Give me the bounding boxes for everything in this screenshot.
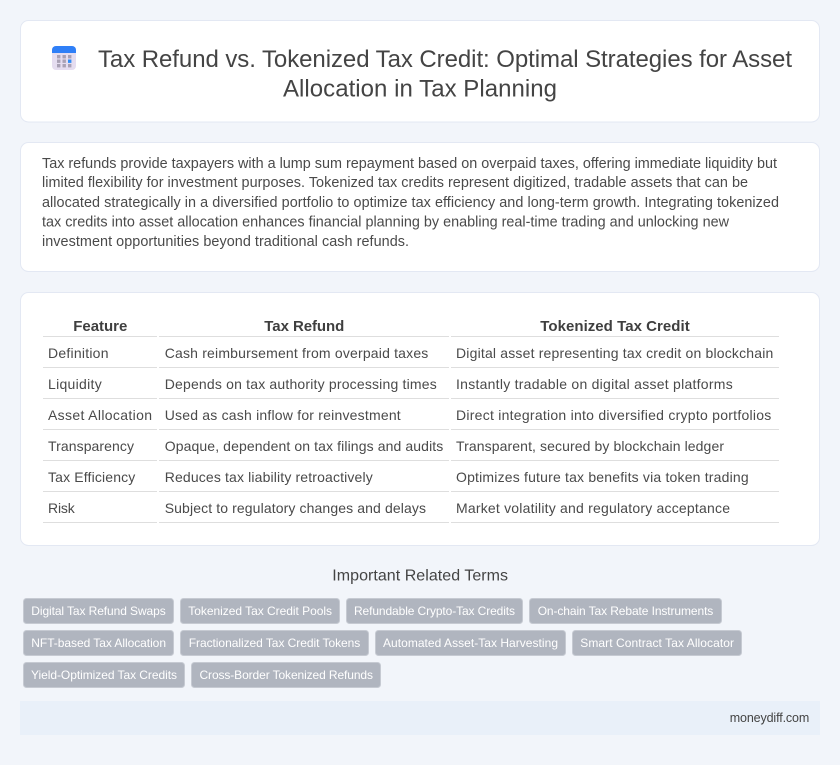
text block: intro: Tax refunds provide taxpayers with a lump sum repayment based on overpaid taxes, offering immediate liquidity but: [42, 156, 777, 172]
row: asset allocation: Direct integration into diversified crypto portfolios: [456, 407, 771, 423]
row: risk: [48, 500, 730, 516]
table header row: Tokenized Tax Credit: [540, 318, 690, 335]
row: tax efficiency: Tax Efficiency: [48, 469, 135, 485]
panel: intro paragraph: [20, 142, 820, 272]
tag list: related terms: [24, 598, 742, 688]
text block: intro: tax credits into asset allocation enhances financial planning by enabling real-time trading and unlocking new: [42, 214, 730, 230]
panel: comparison table: [20, 292, 820, 546]
tag: [192, 662, 380, 688]
row: risk: Risk: [48, 500, 76, 516]
title: Tax Refund vs. Tokenized Tax Credit: Optimal Strategies for Asset: [98, 46, 792, 73]
row: risk: Market volatility and regulatory acceptance: [456, 500, 730, 516]
row: asset allocation: Asset Allocation: [48, 407, 152, 423]
tag: [572, 630, 742, 656]
footer bar: [20, 701, 820, 735]
row: definition: Cash reimbursement from overpaid taxes: [165, 345, 428, 361]
row: tax efficiency: Reduces tax liability retroactively: [165, 469, 373, 485]
row: tax efficiency: Optimizes future tax benefits via token trading: [456, 469, 749, 485]
tag: Smart Contract Tax Allocator: [580, 636, 734, 650]
text block: intro: limited flexibility for investment purposes. Tokenized tax credits represent digitized, tradable assets that can be: [42, 175, 748, 191]
title: Allocation in Tax Planning: [283, 76, 557, 102]
footer source text: moneydiff.com: [730, 711, 809, 725]
tag: [180, 598, 340, 624]
text block: intro: investment opportunities beyond traditional cash refunds.: [42, 234, 409, 250]
row: definition: Definition: [48, 345, 108, 361]
table header row: Tax Refund: [264, 318, 344, 335]
row: liquidity: Instantly tradable on digital asset platforms: [456, 376, 733, 392]
tag: Automated Asset-Tax Harvesting: [383, 636, 558, 650]
text block: intro: [42, 156, 779, 250]
row: tax efficiency: [48, 469, 749, 485]
row: transparency: Transparency: [48, 438, 134, 454]
tag: Digital Tax Refund Swaps: [31, 604, 166, 618]
tag: Yield-Optimized Tax Credits: [31, 668, 177, 682]
tag: [24, 662, 184, 688]
icon: calendar: [52, 46, 76, 70]
tag: [530, 598, 722, 624]
row: liquidity: Depends on tax authority processing times: [165, 376, 437, 392]
row: definition: Digital asset representing tax credit on blockchain: [456, 345, 773, 361]
tag: Fractionalized Tax Credit Tokens: [189, 636, 360, 650]
row: liquidity: [48, 376, 733, 392]
tag: [24, 630, 174, 656]
tag: NFT-based Tax Allocation: [31, 636, 166, 650]
table header row: Feature: [73, 318, 127, 335]
tag: [180, 630, 368, 656]
row: risk: Subject to regulatory changes and delays: [165, 500, 426, 516]
text block: intro: allocated strategically in a diversified portfolio to optimize tax efficiency and long-term growth. Integrating tokenized: [42, 195, 779, 211]
panel: title header: [20, 20, 820, 122]
tag: [376, 630, 566, 656]
row: asset allocation: Used as cash inflow for reinvestment: [165, 407, 401, 423]
tag: Tokenized Tax Credit Pools: [188, 604, 332, 618]
row: transparency: [48, 438, 724, 454]
tag: [346, 598, 522, 624]
row: definition: [48, 345, 773, 361]
tag: Refundable Crypto-Tax Credits: [354, 604, 515, 618]
table header row: [73, 318, 690, 335]
tag: On-chain Tax Rebate Instruments: [538, 604, 713, 618]
tag: [24, 598, 174, 624]
row: transparency: Opaque, dependent on tax filings and audits: [165, 438, 443, 454]
heading: related terms: Important Related Terms: [332, 568, 508, 585]
tag: Cross-Border Tokenized Refunds: [200, 668, 373, 682]
row: transparency: Transparent, secured by blockchain ledger: [456, 438, 724, 454]
title: [98, 46, 792, 102]
row: asset allocation: [48, 407, 771, 423]
row: liquidity: Liquidity: [48, 376, 102, 392]
